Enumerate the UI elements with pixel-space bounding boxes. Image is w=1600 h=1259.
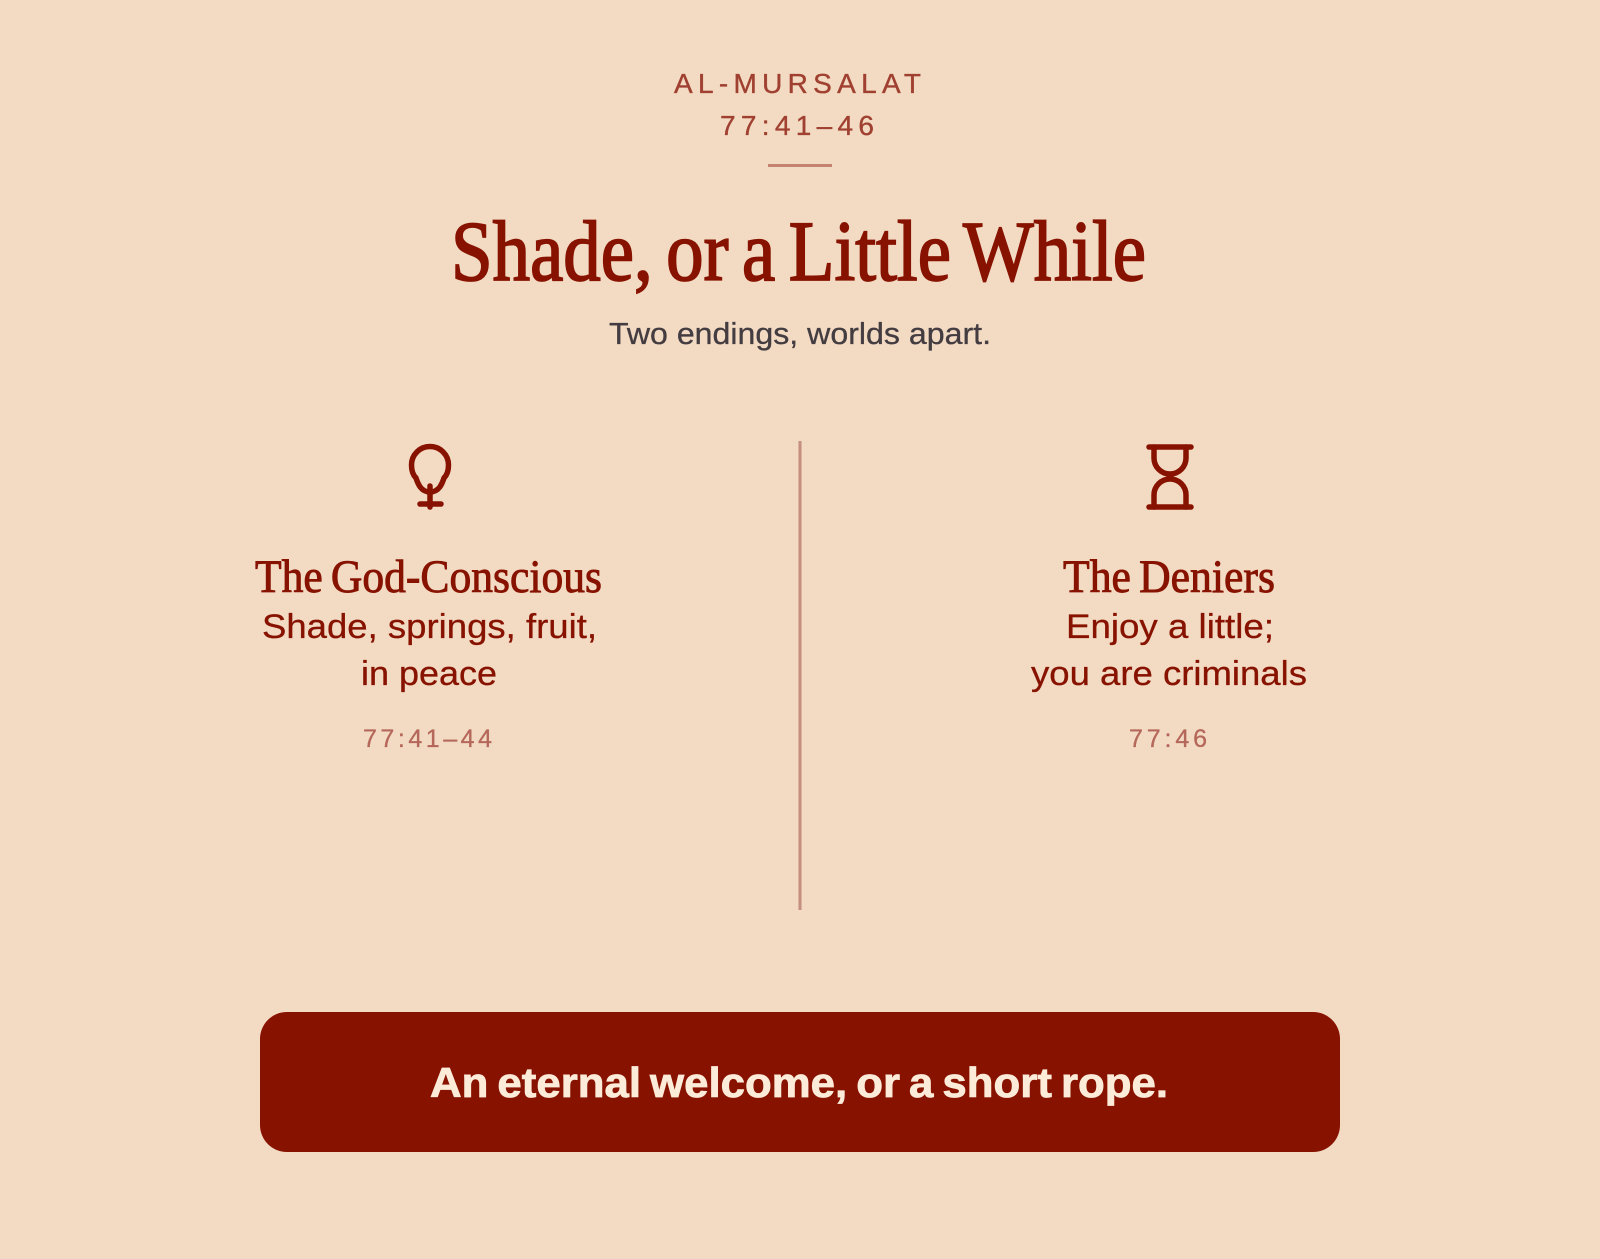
description line 2: in peace xyxy=(361,655,497,693)
verse reference: 77:41–44 xyxy=(363,725,492,753)
header xyxy=(451,68,1146,351)
icon: lantern xyxy=(412,446,449,507)
banner text: An eternal welcome, or a short rope. xyxy=(430,1059,1168,1106)
banner background xyxy=(260,1012,1340,1152)
eyebrow: surah name: AL-MURSALAT xyxy=(674,68,921,99)
callout banner xyxy=(260,1012,1340,1152)
panel: the God-conscious xyxy=(255,446,602,753)
panel: the deniers xyxy=(1031,447,1307,753)
description line 1: Shade, springs, fruit, xyxy=(262,608,597,646)
description line 1: Enjoy a little; xyxy=(1066,608,1274,646)
icon: hourglass xyxy=(1149,447,1191,507)
title: Shade, or a Little While xyxy=(451,203,1146,299)
verse reference: 77:46 xyxy=(1129,725,1207,753)
eyebrow: verse reference: 77:41–46 xyxy=(720,110,874,141)
center divider xyxy=(798,441,802,910)
heading: The Deniers xyxy=(1063,551,1275,603)
subtitle: Two endings, worlds apart. xyxy=(609,316,991,351)
description line 2: you are criminals xyxy=(1031,655,1307,693)
short rule xyxy=(768,164,832,167)
heading: The God-Conscious xyxy=(255,551,602,603)
